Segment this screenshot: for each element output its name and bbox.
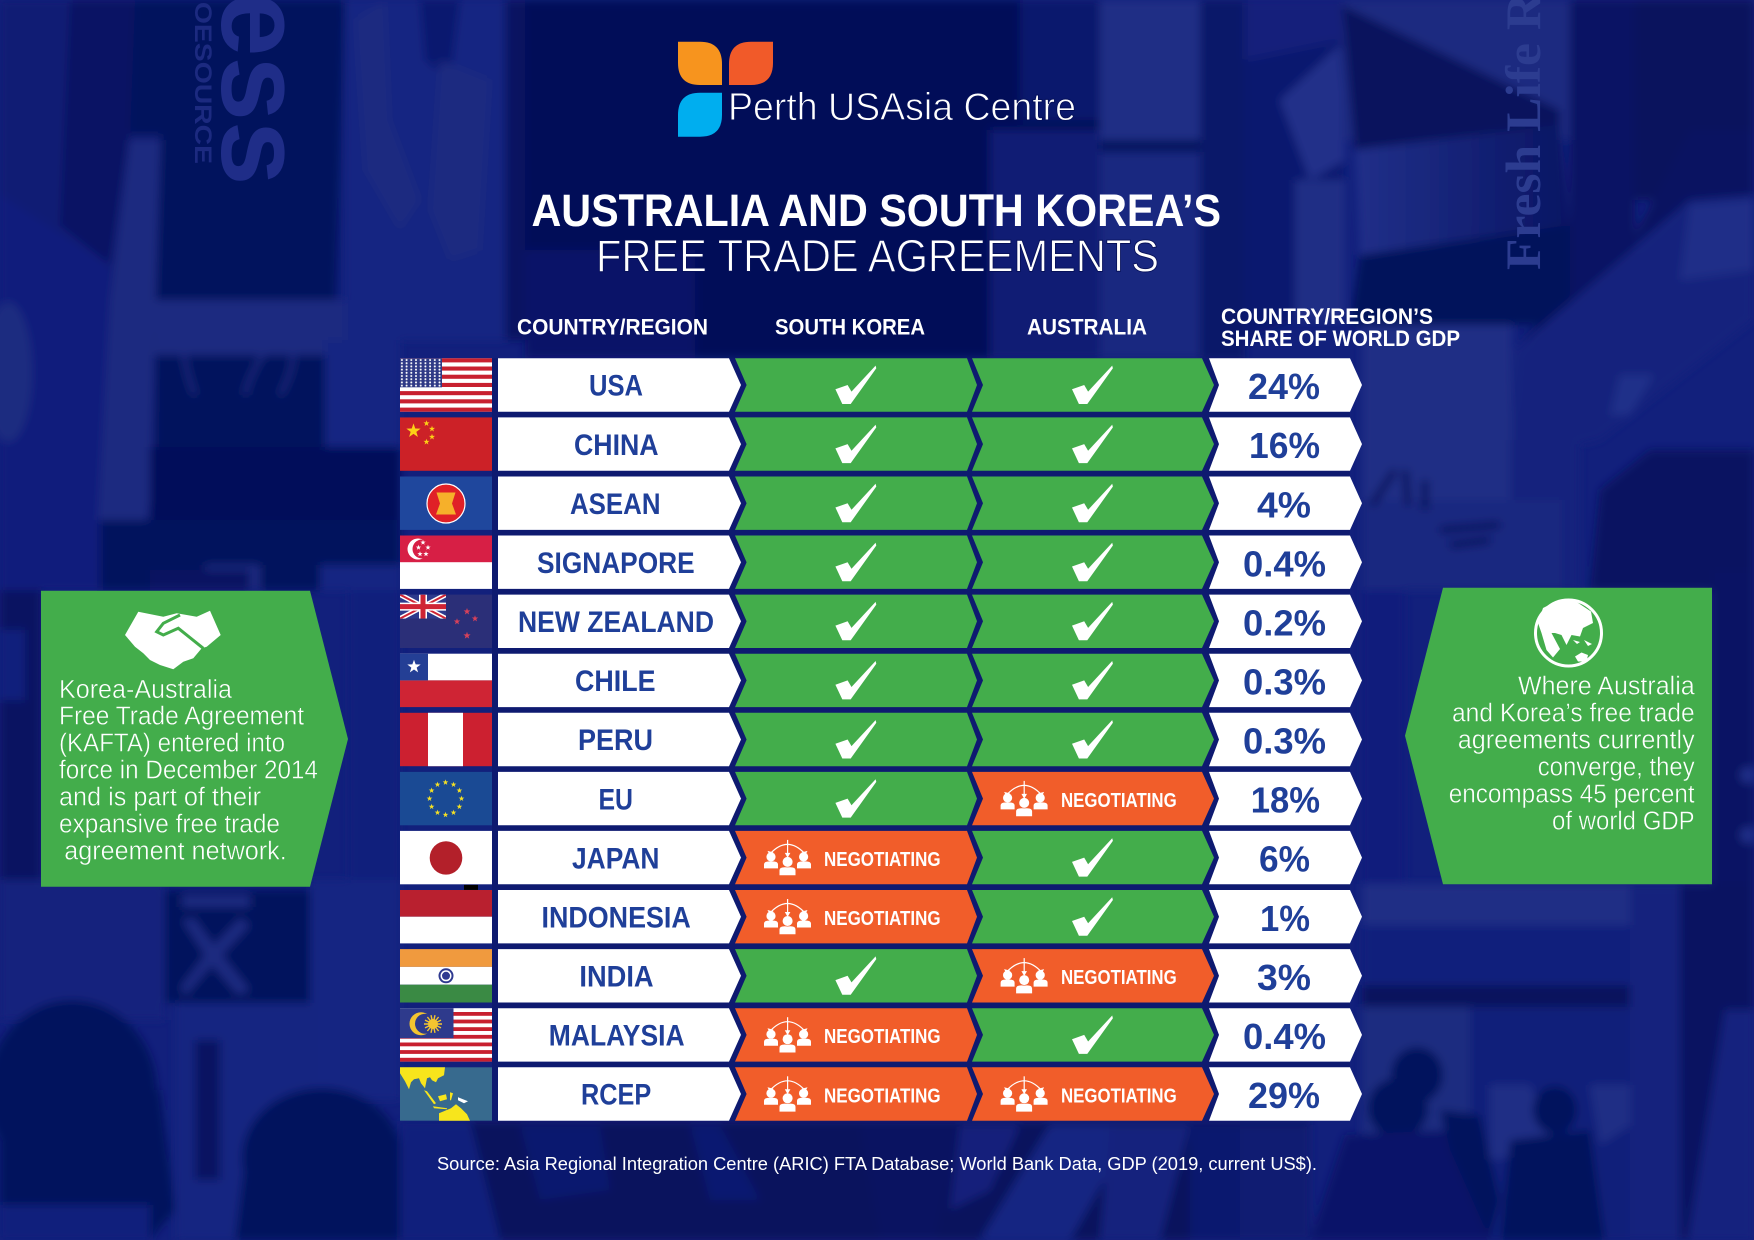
name: Singapore: SIGNAPORE: [537, 547, 695, 580]
callout text: and is part of their: [59, 784, 261, 812]
bottom right: [1362, 884, 1632, 929]
value: India share: 3%: [1257, 957, 1311, 998]
value: USA share: 24%: [1248, 366, 1320, 407]
callout text: encompass 45 percent: [1449, 780, 1695, 808]
name: ASEAN: ASEAN: [570, 488, 660, 521]
callout text: converge, they: [1538, 753, 1695, 781]
icon: handshake: [125, 611, 221, 669]
callout text: expansive free trade: [59, 811, 280, 839]
name: Peru: PERU: [578, 724, 653, 757]
panel: converge callout: [1405, 588, 1712, 884]
value: EU share: 18%: [1251, 780, 1320, 821]
callout text: and Korea’s free trade: [1452, 700, 1695, 728]
row: USA: [400, 358, 1362, 412]
logo: Perth USAsia Centre: [678, 42, 1076, 137]
top right: [1100, 0, 1200, 140]
name: Japan: JAPAN: [572, 842, 659, 875]
status: negotiating: NEGOTIATING: [824, 908, 941, 930]
top left: [0, 0, 170, 590]
callout text: force in December 2014: [59, 757, 318, 785]
flag: India: [400, 949, 492, 1002]
flag: Chile: [400, 654, 492, 707]
header: share of world GDP: [1221, 304, 1460, 351]
row: Singapore: [400, 536, 1362, 589]
value: RCEP share: 29%: [1248, 1075, 1320, 1116]
row: EU: [400, 772, 1362, 825]
name: EU: EU: [598, 783, 633, 816]
header: country/region: COUNTRY/REGION: [517, 315, 708, 340]
callout text: agreements currently: [1458, 727, 1695, 755]
name: RCEP: RCEP: [581, 1079, 651, 1112]
title: [532, 185, 1221, 282]
row: Japan: [400, 831, 1362, 890]
row: ASEAN: [400, 476, 1362, 530]
row: RCEP: [400, 1067, 1362, 1121]
flag: RCEP map: [400, 1067, 492, 1121]
value: Chile share: 0.3%: [1243, 662, 1326, 703]
value: Malaysia share: 0.4%: [1243, 1016, 1326, 1057]
header: South Korea: SOUTH KOREA: [775, 315, 925, 340]
value: Peru share: 0.3%: [1243, 721, 1326, 762]
value: Singapore share: 0.4%: [1243, 543, 1326, 584]
row: Malaysia: [400, 1008, 1362, 1062]
value: Japan share: 6%: [1259, 839, 1310, 880]
flag: Indonesia: [400, 890, 492, 943]
row: India: [400, 949, 1362, 1002]
callout text: of world GDP: [1552, 807, 1695, 835]
title line 2: FREE TRADE AGREEMENTS: [596, 231, 1159, 282]
value: ASEAN share: 4%: [1257, 484, 1311, 525]
flag: Japan: [400, 831, 492, 890]
name: China: CHINA: [574, 429, 659, 462]
source note: Source: Asia Regional Integration Centre (ARIC) FTA Database; World Bank Data, GDP (2019, current US$).: [437, 1153, 1317, 1174]
middle right: [1362, 325, 1512, 500]
status: negotiating: NEGOTIATING: [824, 849, 941, 871]
name: New Zealand: NEW ZEALAND: [518, 606, 714, 639]
status: negotiating: NEGOTIATING: [1061, 790, 1177, 812]
flag: Malaysia: [400, 1008, 492, 1062]
name: Malaysia: MALAYSIA: [549, 1020, 685, 1053]
callout text: Korea-Australia: [59, 676, 233, 704]
icon: globe: [1536, 600, 1602, 666]
flag: Singapore: [400, 536, 492, 589]
top centre: [525, 0, 1100, 358]
name: Indonesia: INDONESIA: [542, 901, 691, 934]
flag: China: [400, 417, 492, 471]
flag: New Zealand: [400, 595, 492, 648]
bottom centre: [400, 1121, 1310, 1240]
status: negotiating: NEGOTIATING: [824, 1026, 941, 1048]
name: Chile: CHILE: [575, 665, 656, 698]
callout text: [59, 676, 318, 866]
value: China share: 16%: [1249, 425, 1320, 466]
middle left: [0, 590, 41, 890]
icon: blue leaf: [678, 93, 722, 137]
status: negotiating: NEGOTIATING: [824, 1085, 941, 1107]
table backing band: [492, 358, 1350, 1121]
flag: Peru: [400, 713, 492, 766]
header: Australia: AUSTRALIA: [1027, 315, 1147, 340]
name: India: INDIA: [579, 960, 654, 993]
callout text: agreement network.: [64, 838, 287, 866]
row: Peru: [400, 713, 1362, 766]
callout text: Where Australia: [1518, 673, 1695, 701]
bottom left: [310, 880, 400, 1100]
callout text: [1449, 673, 1695, 835]
header: share of world GDP: COUNTRY/REGION’S: [1221, 304, 1433, 329]
flag: ASEAN: [400, 476, 492, 530]
value: New Zealand share: 0.2%: [1243, 602, 1326, 643]
callout text: (KAFTA) entered into: [59, 730, 285, 758]
row: New Zealand: [400, 595, 1362, 648]
header: share of world GDP: SHARE OF WORLD GDP: [1221, 326, 1460, 351]
row: China: [400, 417, 1362, 471]
icon: orange leaf: [678, 42, 722, 85]
name: USA: USA: [589, 370, 643, 403]
status: negotiating: NEGOTIATING: [1061, 1085, 1177, 1107]
panel: KAFTA callout: [41, 591, 348, 887]
column headers: [517, 304, 1460, 351]
callout text: Free Trade Agreement: [59, 703, 304, 731]
status: negotiating: NEGOTIATING: [1061, 967, 1177, 989]
flag: EU: [400, 772, 492, 825]
icon: red leaf: [729, 42, 773, 85]
logo wordmark: Perth USAsia Centre: [728, 86, 1076, 129]
signs and lettering: [180, 330, 293, 395]
value: Indonesia share: 1%: [1260, 898, 1310, 939]
row: Indonesia: [400, 890, 1362, 943]
row: Chile: [400, 654, 1362, 707]
title line 1: AUSTRALIA AND SOUTH KOREA’S: [532, 185, 1221, 236]
flag: USA: [400, 358, 492, 412]
